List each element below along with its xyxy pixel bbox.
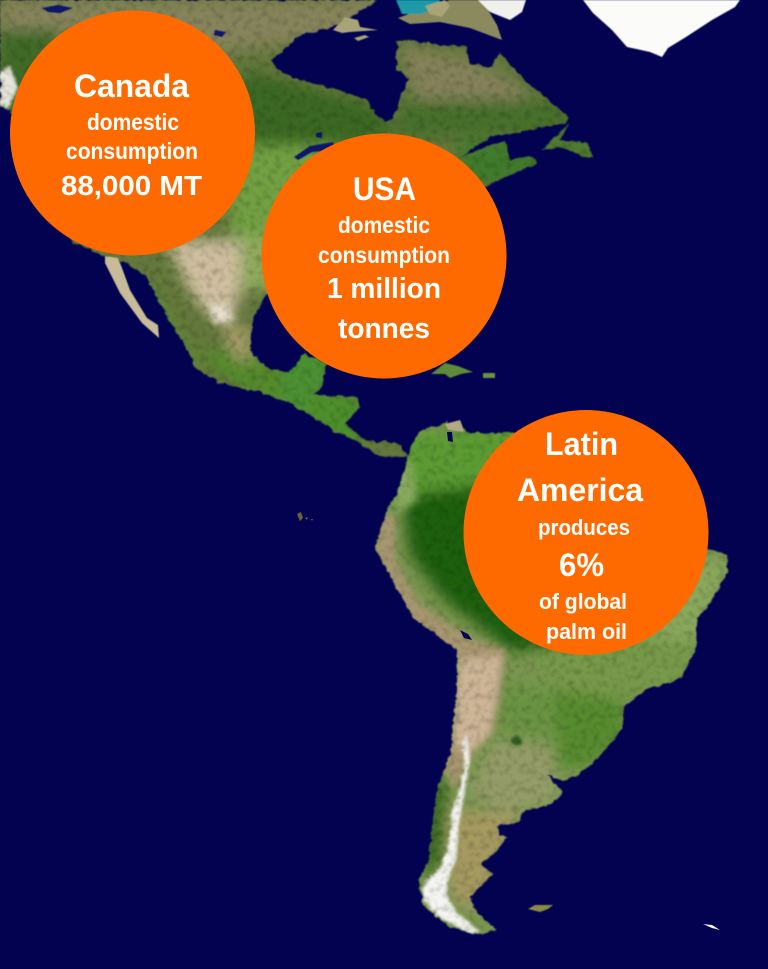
callout: USA [262, 134, 506, 378]
map: Greenland [583, 0, 740, 57]
callout: Latin America [464, 410, 708, 655]
map: Falkland Islands [528, 905, 553, 912]
island: Coats [354, 35, 369, 41]
callout: Canada [10, 10, 255, 256]
label: consumption: consumption [318, 242, 450, 268]
lake: Great Bear [42, 5, 73, 13]
number: 88,000 MT: 88,000 MT [61, 170, 202, 201]
sub-element: Andes snow [422, 735, 480, 933]
lake: Winnipeg [316, 132, 322, 138]
map: Caribbean islands [431, 363, 495, 378]
shallow water: Foxe Basin [396, 0, 440, 14]
label: domestic: domestic [87, 109, 179, 135]
map: North and Central America [0, 0, 600, 470]
heading: Canada: Canada [74, 68, 189, 104]
label: tonnes: tonnes [338, 313, 430, 345]
heading: America: America [517, 472, 643, 508]
label: palm oil: palm oil [546, 619, 627, 644]
map: Newfoundland [542, 123, 593, 157]
label: domestic: domestic [338, 212, 430, 238]
map: South America [370, 415, 740, 940]
lake: Athabasca [214, 30, 226, 37]
island: Hispaniola [431, 363, 473, 378]
number: 1 million: 1 million [327, 273, 441, 305]
map: Guajira peninsula [445, 420, 464, 432]
map: Lake Maracaibo [447, 432, 453, 442]
label: of global: of global [539, 589, 627, 614]
circle: Canada [10, 10, 255, 256]
heading: Latin: Latin [545, 426, 618, 462]
map: Galapagos Islands [297, 512, 313, 521]
sub-element: northern Mexico highlands [205, 305, 235, 322]
island: Baffin south [398, 0, 502, 40]
heading: USA: USA [353, 171, 416, 207]
island: Puerto Rico [483, 373, 495, 378]
island: Southampton [333, 17, 378, 33]
circle: USA [262, 134, 506, 378]
circle: Latin America [464, 410, 708, 655]
map: Lake Titicaca [460, 630, 472, 640]
sub-element: western mountains snow [0, 66, 18, 108]
sub-element: Pantanal wetland [511, 736, 523, 746]
label: produces: produces [538, 515, 630, 540]
island: Foxe Basin [425, 0, 450, 17]
map: South Georgia [703, 924, 720, 930]
map: Canadian Arctic islands [333, 0, 526, 41]
lake: Superior [294, 142, 336, 160]
island: Baffin snow [478, 0, 526, 20]
label: consumption: consumption [66, 138, 198, 164]
map: Baja California [105, 256, 159, 338]
map: Canadian lakes [42, 5, 336, 160]
number: 6%: 6% [559, 547, 604, 583]
